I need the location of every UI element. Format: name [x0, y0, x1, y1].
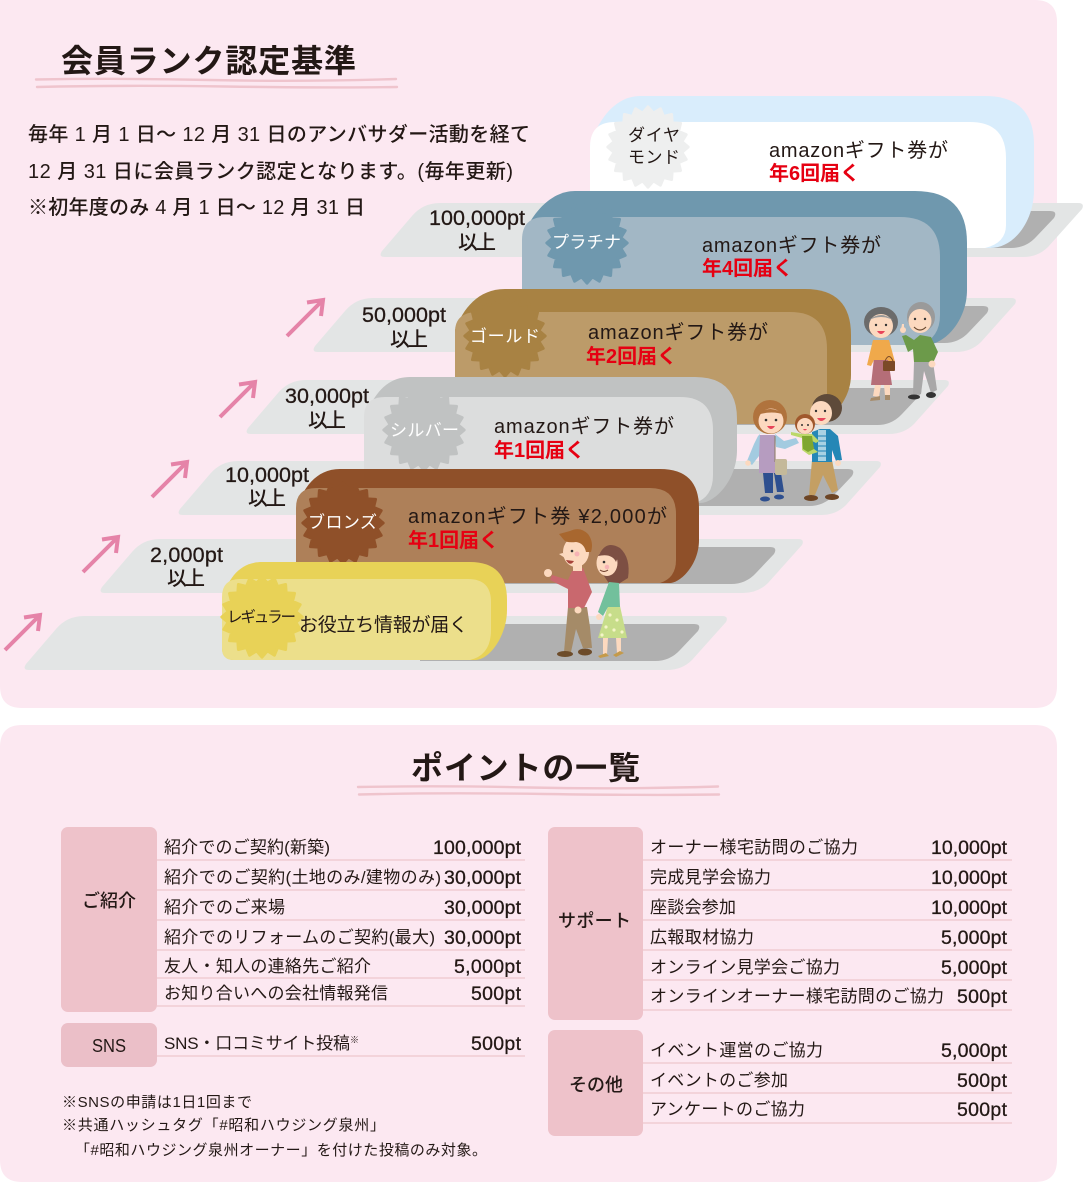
row: 広報取材協力 — [650, 928, 754, 947]
footnotes: 「#昭和ハウジング泉州オーナー」を付けた投稿のみ対象。 — [75, 1142, 487, 1159]
row: アンケートのご協力 — [650, 1100, 805, 1119]
badge: diamond — [608, 107, 688, 187]
tier: regular: お役立ち情報が届く — [299, 614, 468, 636]
table: SNS: 500pt — [471, 1033, 522, 1055]
row: 5,000pt — [941, 957, 1008, 979]
badge: regular — [222, 577, 302, 657]
arrow: step 1 — [5, 615, 40, 650]
table: support: サポート — [558, 911, 631, 931]
row: 10,000pt — [931, 897, 1008, 919]
threshold: 30,000pt — [285, 384, 369, 432]
tier: diamond: 年6回届く — [769, 162, 860, 185]
intro text: 12 月 31 日に会員ランク認定となります。(毎年更新) — [28, 160, 513, 183]
row: 500pt — [957, 1099, 1008, 1121]
row: 5,000pt — [454, 956, 522, 978]
title: rank criteria: 会員ランク認定基準 — [61, 43, 356, 79]
intro text — [28, 123, 530, 219]
threshold: 10,000pt: 以上 — [248, 487, 286, 510]
threshold: 10,000pt — [225, 463, 309, 510]
footnotes — [62, 1094, 487, 1159]
badge: silver: シルバー — [390, 421, 459, 440]
row: 500pt — [957, 986, 1008, 1008]
tier: regular — [25, 562, 727, 670]
row: 友人・知人の連絡先ご紹介 — [164, 957, 371, 976]
row: 500pt — [957, 1070, 1008, 1092]
row — [643, 1070, 1012, 1093]
row: 座談会参加 — [650, 898, 736, 917]
row: オンライン見学会ご協力 — [650, 958, 840, 977]
row: 紹介でのご来場 — [164, 898, 285, 917]
young man — [544, 529, 592, 657]
row: 5,000pt — [941, 927, 1008, 949]
row — [157, 867, 525, 890]
row: オンラインオーナー様宅訪問のご協力 — [650, 987, 944, 1006]
tier: gold: amazonギフト券が — [588, 321, 768, 344]
row — [643, 1040, 1012, 1063]
threshold: 2,000pt: 2,000pt — [150, 543, 223, 567]
illustration: young couple — [544, 529, 629, 658]
badge: gold: ゴールド — [470, 326, 540, 346]
table: referral: ご紹介 — [82, 891, 136, 911]
threshold: 30,000pt: 以上 — [308, 409, 346, 432]
footnotes: ※共通ハッシュタグ「#昭和ハウジング泉州」 — [62, 1117, 385, 1134]
row: お知り合いへの会社情報発信 — [164, 984, 388, 1003]
row — [157, 837, 525, 860]
tier: gold: 年2回届く — [586, 345, 677, 368]
row: 500pt — [471, 983, 522, 1005]
panel: member rank criteria — [0, 0, 1083, 708]
badge: platinum: プラチナ — [552, 233, 621, 252]
table: other: その他 — [569, 1075, 623, 1095]
threshold: 100,000pt: 100,000pt — [429, 206, 525, 230]
row — [157, 927, 525, 950]
baby — [791, 414, 819, 455]
row — [643, 837, 1012, 860]
badge: silver — [384, 390, 464, 470]
row — [157, 983, 525, 1006]
threshold: 100,000pt: 以上 — [458, 231, 496, 254]
row: 10,000pt — [931, 867, 1008, 889]
table: other — [548, 1030, 1012, 1136]
badge: bronze: ブロンズ — [308, 512, 377, 532]
badge: diamond: ダイヤ — [628, 126, 680, 145]
row: 100,000pt — [433, 837, 522, 859]
panel: points list — [0, 725, 1057, 1182]
row — [643, 1099, 1012, 1123]
table: SNS: ※ — [350, 1035, 359, 1045]
tier: bronze: amazonギフト券 ¥2,000が — [408, 505, 667, 528]
arrow: step 5 — [287, 300, 323, 336]
tier: silver: amazonギフト券が — [494, 415, 674, 438]
row — [643, 927, 1012, 950]
tier: platinum — [314, 191, 1016, 352]
illustration: family with baby — [745, 394, 842, 502]
row: イベント運営のご協力 — [650, 1041, 823, 1060]
row — [157, 897, 525, 920]
footnotes: ※SNSの申請は1日1回まで — [62, 1094, 252, 1111]
row: 30,000pt — [444, 867, 522, 889]
row — [643, 957, 1012, 980]
tier: gold — [247, 289, 949, 434]
row — [643, 867, 1012, 890]
row — [157, 956, 525, 978]
row: オーナー様宅訪問のご協力 — [650, 838, 858, 857]
row: 5,000pt — [941, 1040, 1008, 1062]
table: SNS: SNS — [92, 1036, 126, 1056]
row: 紹介でのご契約(新築) — [164, 838, 330, 857]
badge: diamond: モンド — [628, 148, 680, 167]
threshold: 100,000pt — [429, 206, 525, 254]
row — [643, 986, 1012, 1010]
tier: platinum: 年4回届く — [702, 257, 793, 280]
intro text: 毎年 1 月 1 日〜 12 月 31 日のアンバサダー活動を経て — [28, 123, 530, 146]
arrow: step 3 — [152, 462, 187, 497]
table: support — [548, 827, 1012, 1020]
elderly man — [900, 302, 938, 400]
row: 完成見学会協力 — [650, 868, 771, 887]
table: SNS — [61, 1023, 525, 1067]
badge: gold — [465, 296, 545, 376]
badge: regular: レギュラー — [227, 608, 296, 626]
row: 紹介でのご契約(土地のみ/建物のみ) — [164, 868, 441, 887]
tier: silver: 年1回届く — [494, 439, 585, 462]
mother — [745, 400, 799, 502]
row: 紹介でのリフォームのご契約(最大) — [164, 928, 435, 947]
arrow: step 2 — [83, 537, 118, 572]
badge: bronze — [303, 483, 383, 563]
intro text: ※初年度のみ 4 月 1 日〜 12 月 31 日 — [28, 196, 365, 219]
row: 30,000pt — [444, 927, 522, 949]
tier: platinum: amazonギフト券が — [702, 234, 881, 257]
table: referral — [61, 827, 525, 1012]
threshold: 30,000pt: 30,000pt — [285, 384, 369, 408]
threshold: 2,000pt — [150, 543, 223, 590]
tier: silver — [179, 377, 881, 515]
row: イベントのご参加 — [650, 1071, 788, 1090]
badge: platinum — [547, 203, 627, 283]
threshold: 50,000pt: 以上 — [390, 328, 428, 351]
illustration: elderly couple — [864, 302, 938, 401]
threshold: 2,000pt: 以上 — [167, 567, 205, 590]
tier: bronze — [101, 469, 803, 593]
tier: diamond — [381, 96, 1083, 257]
heading: points list: ポイントの一覧 — [411, 750, 640, 786]
tier: diamond: amazonギフト券が — [769, 139, 948, 162]
father — [804, 394, 842, 501]
threshold: 50,000pt — [362, 303, 446, 351]
elderly woman — [864, 307, 898, 401]
row — [643, 897, 1012, 920]
threshold: 50,000pt: 50,000pt — [362, 303, 446, 327]
threshold: 10,000pt: 10,000pt — [225, 463, 309, 487]
row: 30,000pt — [444, 897, 522, 919]
young woman — [596, 545, 629, 658]
tier: bronze: 年1回届く — [408, 529, 499, 552]
row: 10,000pt — [931, 837, 1008, 859]
arrow: step 4 — [220, 382, 255, 417]
table: SNS: SNS・口コミサイト投稿 — [164, 1034, 350, 1053]
